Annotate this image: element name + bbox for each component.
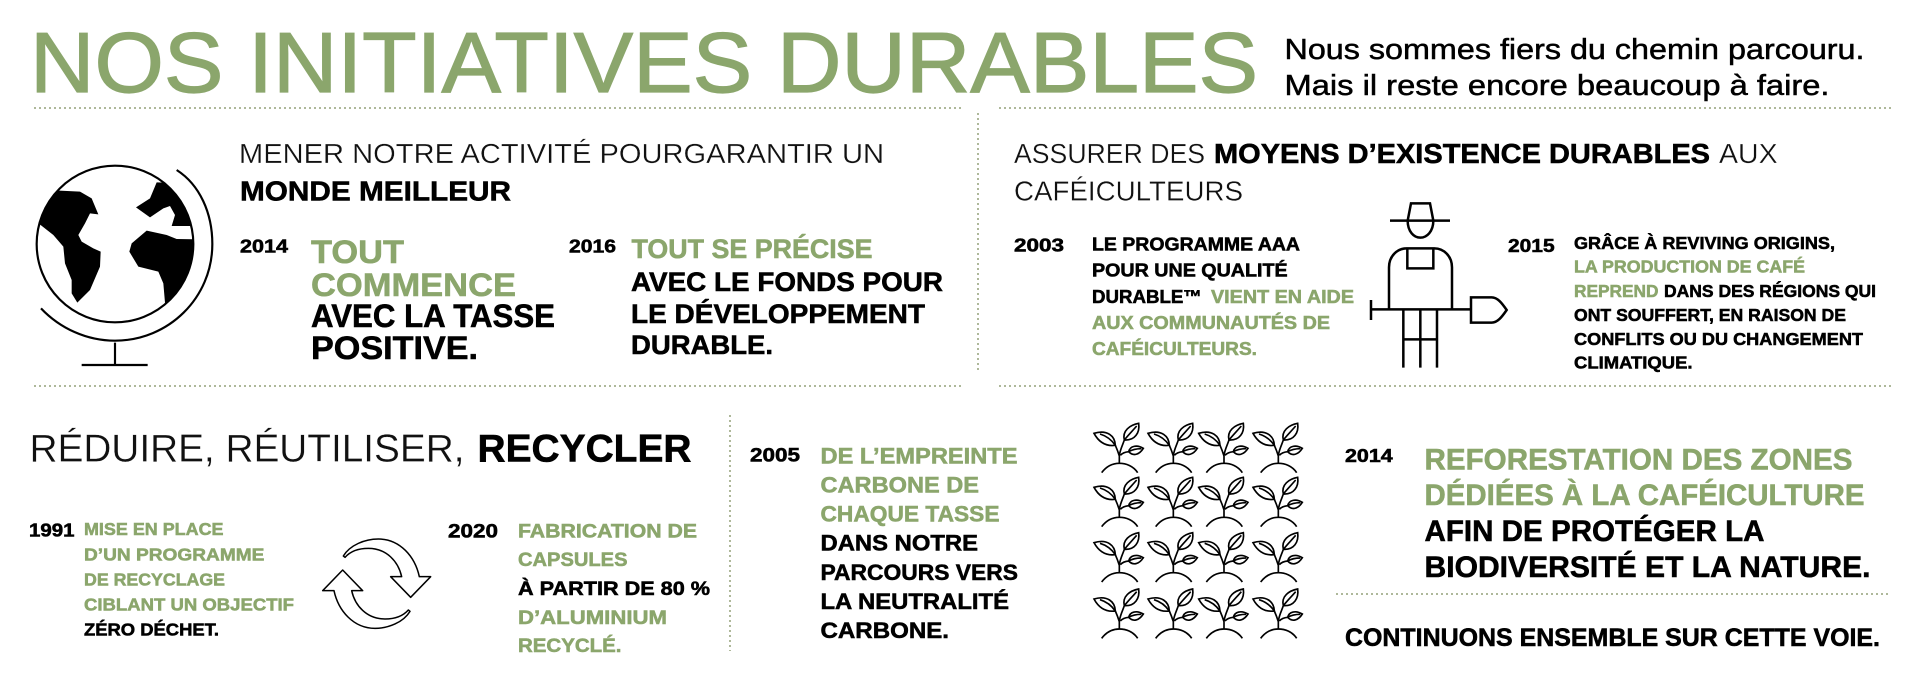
icon: globe — [30, 166, 212, 365]
milestone 2014: 2014 — [240, 237, 288, 257]
heading: recycler — [30, 428, 692, 471]
milestone 2016: DURABLE. — [631, 330, 773, 360]
milestone 2015: ONT SOUFFERT, EN RAISON DE — [1574, 305, 1846, 325]
milestone 2020: 2020 — [448, 521, 498, 542]
milestone 2003: LE PROGRAMME AAA — [1092, 234, 1300, 255]
milestone 2003: DURABLE™ — [1092, 286, 1202, 307]
milestone 2014: COMMENCE — [311, 267, 516, 303]
milestone 2020: RECYCLÉ. — [518, 634, 622, 657]
milestone 2016: AVEC LE FONDS POUR — [631, 267, 943, 297]
panel: reforestation: BIODIVERSITÉ ET LA NATURE. — [1424, 550, 1870, 584]
milestone 2020: CAPSULES — [518, 549, 628, 571]
panel: empreinte carbone: CARBONE DE — [820, 473, 979, 498]
milestone 2015: 2015 — [1508, 236, 1555, 256]
panel: empreinte carbone: CARBONE. — [820, 618, 949, 643]
milestone 2015: GRÂCE À REVIVING ORIGINS, — [1574, 232, 1835, 253]
panel: recycler — [29, 428, 710, 657]
milestone 2003 — [1014, 234, 1354, 359]
heading: moyens d'existence: MOYENS D’EXISTENCE DURABLES — [1214, 138, 1710, 169]
panel: empreinte carbone: PARCOURS VERS — [820, 560, 1018, 585]
title: NOS INITIATIVES DURABLES — [30, 16, 1258, 111]
panel: empreinte carbone: DANS NOTRE — [820, 531, 978, 556]
panel: empreinte carbone: CHAQUE TASSE — [820, 502, 1000, 527]
subtitle text: Mais il reste encore beaucoup à faire. — [1284, 70, 1830, 102]
milestone 2003: POUR UNE QUALITÉ — [1092, 260, 1288, 281]
panel: empreinte carbone: DE L’EMPREINTE — [820, 443, 1018, 468]
heading: monde meilleur: MONDE MEILLEUR — [240, 176, 511, 207]
milestone 2015: DANS DES RÉGIONS QUI — [1664, 280, 1876, 301]
heading: monde meilleur — [239, 138, 884, 207]
heading: moyens d'existence — [1014, 138, 1778, 207]
heading: moyens d'existence: AUX — [1719, 138, 1778, 169]
milestone 2014: AVEC LA TASSE — [311, 298, 555, 334]
milestone 2015: CLIMATIQUE. — [1574, 353, 1692, 373]
panel: reforestation: AFIN DE PROTÉGER LA — [1424, 514, 1764, 548]
milestone 2003: VIENT EN AIDE — [1211, 286, 1354, 307]
milestone 1991: D’UN PROGRAMME — [84, 544, 264, 564]
milestone 2014: TOUT — [311, 234, 404, 270]
milestone 1991: CIBLANT UN OBJECTIF — [84, 594, 294, 614]
milestone 2020: FABRICATION DE — [518, 520, 697, 542]
milestone 2003: CAFÉICULTEURS. — [1092, 338, 1257, 359]
milestone 1991: ZÉRO DÉCHET. — [84, 619, 219, 640]
milestone 2015: LA PRODUCTION DE CAFÉ — [1574, 256, 1805, 277]
heading: recycler: RÉDUIRE, RÉUTILISER, — [30, 428, 464, 471]
milestone 2014 — [240, 234, 555, 366]
milestone 1991 — [29, 519, 294, 640]
icon: grid of sprouts — [1094, 423, 1302, 638]
milestone 2016 — [569, 233, 943, 360]
icon: farmer — [1371, 203, 1507, 368]
milestone 2015: REPREND — [1574, 281, 1658, 301]
heading: monde meilleur: MENER NOTRE ACTIVITÉ POURGARANTIR UN — [239, 138, 884, 169]
milestone 2015: CONFLITS OU DU CHANGEMENT — [1574, 329, 1863, 349]
panel: cafeiculteurs — [1014, 138, 1876, 373]
panel: monde meilleur — [30, 138, 943, 366]
milestone 2016: LE DÉVELOPPEMENT — [631, 298, 926, 329]
panel: reforestation: DÉDIÉES À LA CAFÉICULTURE — [1424, 478, 1864, 512]
panel: reforestation: REFORESTATION DES ZONES — [1424, 444, 1852, 476]
milestone 1991: 1991 — [29, 521, 74, 541]
milestone 2014: POSITIVE. — [311, 330, 478, 366]
milestone 2003: 2003 — [1014, 236, 1064, 256]
subtitle text — [1284, 34, 1864, 102]
icon: recycling arrows — [323, 539, 431, 628]
subtitle text: Nous sommes fiers du chemin parcouru. — [1284, 34, 1864, 66]
milestone 2020 — [448, 520, 710, 657]
heading: moyens d'existence: ASSURER DES — [1014, 138, 1205, 169]
closing statement: CONTINUONS ENSEMBLE SUR CETTE VOIE. — [1345, 624, 1880, 652]
milestone 2020: D’ALUMINIUM — [518, 607, 667, 629]
panel: empreinte carbone: 2005 — [750, 445, 800, 467]
panel: empreinte carbone: LA NEUTRALITÉ — [820, 589, 1009, 614]
panel: reforestation: 2014 — [1345, 446, 1393, 466]
panel: empreinte carbone — [750, 443, 1018, 643]
heading: recycler: RECYCLER — [478, 428, 692, 471]
milestone 2016: TOUT SE PRÉCISE — [632, 233, 872, 264]
milestone 2020: À PARTIR DE 80 % — [518, 577, 710, 600]
heading: moyens d'existence: CAFÉICULTEURS — [1014, 176, 1243, 207]
panel: reforestation — [1345, 444, 1870, 584]
milestone 2003: AUX COMMUNAUTÉS DE — [1092, 312, 1330, 333]
milestone 1991: DE RECYCLAGE — [84, 569, 225, 589]
milestone 2016: 2016 — [569, 237, 616, 257]
milestone 2015 — [1508, 232, 1876, 373]
milestone 1991: MISE EN PLACE — [84, 519, 224, 539]
